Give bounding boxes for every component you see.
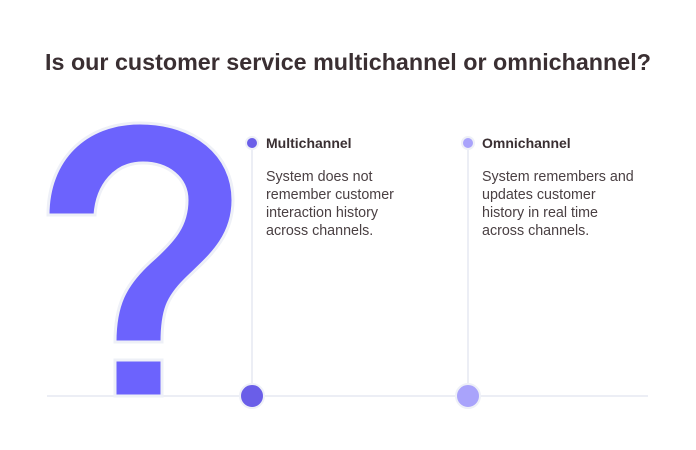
markers: multichannel: [240, 137, 264, 408]
panel: multichannel: System does not remember customer interaction history across channels.: [266, 169, 394, 239]
icon: question mark: [48, 123, 233, 396]
panel: omnichannel: [482, 135, 634, 239]
panel: omnichannel: Omnichannel: [482, 135, 571, 151]
markers: omnichannel: [456, 137, 480, 408]
panel: multichannel: [266, 135, 394, 239]
panel: omnichannel: System remembers and updates customer history in real time across channels.: [482, 169, 634, 239]
title: Is our customer service multichannel or omnichannel?: [45, 49, 651, 75]
panel: multichannel: Multichannel: [266, 135, 352, 151]
